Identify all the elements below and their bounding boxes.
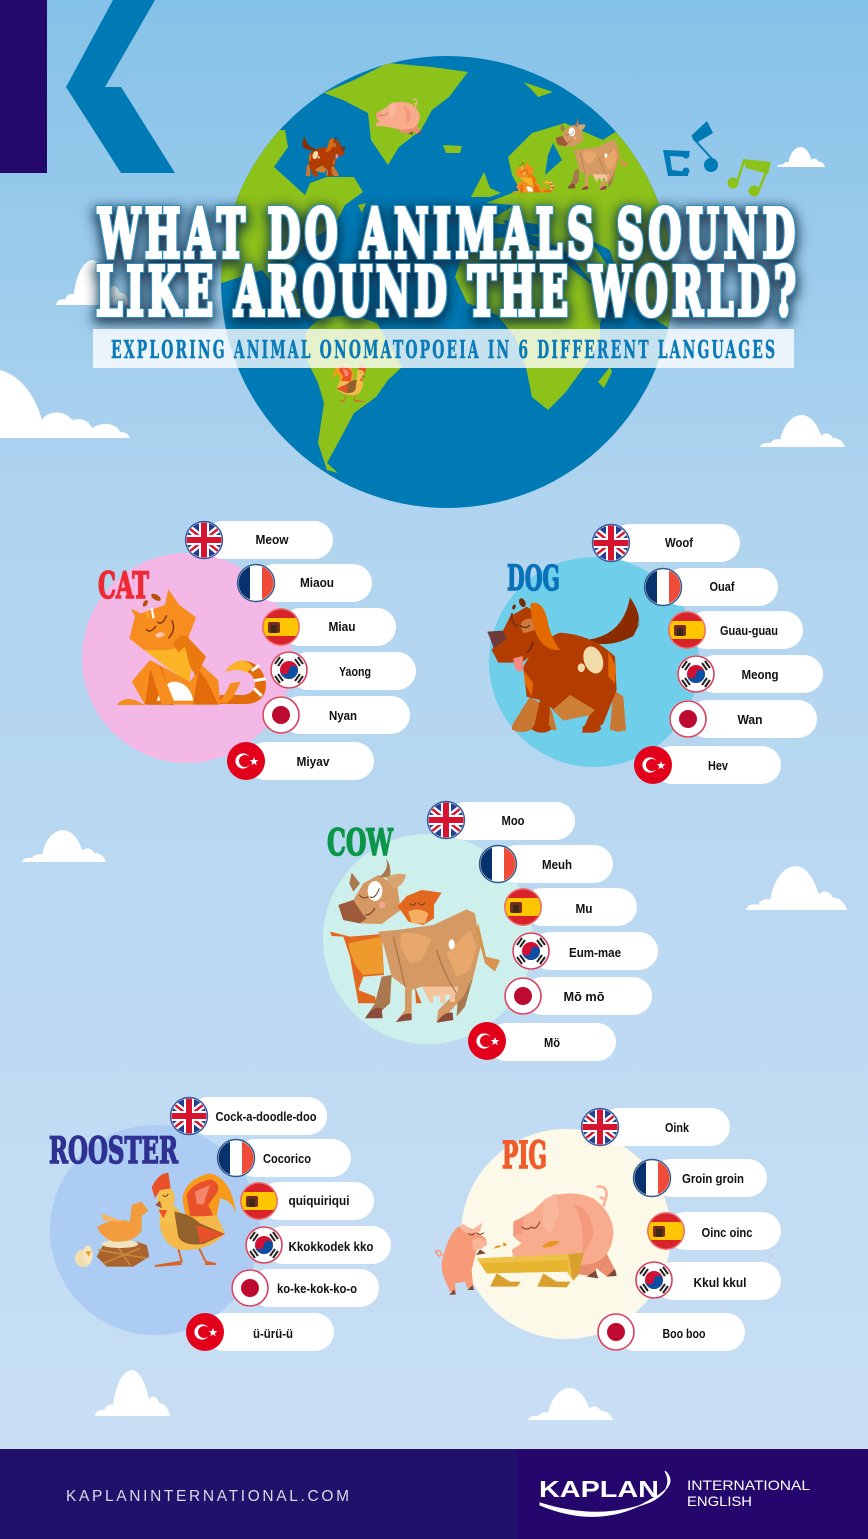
cloud: top right bbox=[777, 147, 825, 167]
navy corner block bbox=[0, 0, 47, 173]
pig illustration bbox=[436, 1186, 617, 1295]
pig: English bbox=[581, 1108, 730, 1146]
cat: English bbox=[185, 521, 333, 559]
cat: Spanish: Miau bbox=[328, 619, 356, 634]
cow: Spanish: Mu bbox=[576, 901, 593, 916]
mini dog on globe bbox=[302, 137, 346, 176]
cow: Japanese bbox=[504, 977, 652, 1015]
cow heading: COW bbox=[327, 822, 393, 864]
subtitle banner bbox=[93, 329, 794, 368]
cat illustration bbox=[117, 589, 266, 705]
rooster: Spanish bbox=[240, 1182, 374, 1220]
cow illustration bbox=[330, 858, 500, 1023]
cat: Korean bbox=[270, 651, 416, 690]
cat: Japanese bbox=[262, 696, 410, 734]
pig: English: Oink bbox=[665, 1120, 690, 1135]
panel: cat bbox=[82, 521, 416, 780]
cow: French: Meuh bbox=[542, 857, 572, 872]
cow: Spanish bbox=[504, 888, 637, 926]
dog: Turkish bbox=[634, 746, 781, 784]
rooster: French bbox=[217, 1139, 351, 1177]
rooster: Spanish: quiquiriqui bbox=[288, 1193, 350, 1208]
Kaplan logo: ENGLISH bbox=[687, 1493, 752, 1509]
panel: dog bbox=[487, 524, 823, 784]
rooster: English: Cock-a-doodle-doo bbox=[216, 1109, 317, 1124]
rooster: English bbox=[170, 1097, 327, 1135]
rooster: Korean: Kkokkodek kko bbox=[288, 1239, 374, 1254]
cow: Turkish: Mö bbox=[544, 1035, 560, 1050]
cat: Spanish bbox=[262, 608, 396, 646]
pig: Spanish bbox=[647, 1212, 781, 1250]
dog circle bbox=[489, 557, 699, 767]
cat: Japanese: Nyan bbox=[329, 708, 357, 723]
panel: cow bbox=[323, 801, 658, 1061]
cow circle bbox=[323, 834, 533, 1044]
dog: Spanish bbox=[668, 611, 803, 649]
cloud: right centre bbox=[746, 866, 847, 910]
rooster: Japanese bbox=[231, 1269, 379, 1307]
pig: Japanese: Boo boo bbox=[662, 1326, 706, 1341]
Kaplan logo: KAPLAN bbox=[539, 1476, 659, 1502]
pig: Korean bbox=[635, 1261, 781, 1300]
rooster heading: ROOSTER bbox=[49, 1130, 179, 1172]
dog: Turkish: Hev bbox=[708, 758, 729, 773]
panel: pig bbox=[436, 1108, 781, 1351]
cow: English: Moo bbox=[502, 813, 525, 828]
subtitle banner: EXPLORING ANIMAL ONOMATOPOEIA IN 6 DIFFERENT LANGUAGES bbox=[111, 336, 775, 364]
mini cow on globe bbox=[556, 117, 627, 190]
title bbox=[96, 194, 796, 331]
dog: Spanish: Guau-guau bbox=[720, 623, 778, 638]
cloud: left behind title bbox=[56, 260, 130, 305]
Kaplan logo bbox=[539, 1471, 810, 1516]
cloud: left centre bbox=[22, 830, 106, 862]
Kaplan logo: INTERNATIONAL bbox=[687, 1477, 810, 1493]
rooster: Japanese: ko-ke-kok-ko-o bbox=[277, 1281, 357, 1296]
mini pig on globe bbox=[376, 99, 421, 134]
footer URL: KAPLANINTERNATIONAL.COM bbox=[66, 1488, 349, 1505]
cat heading: CAT bbox=[98, 565, 149, 607]
mini cat on globe bbox=[512, 161, 554, 193]
pig: French bbox=[633, 1159, 767, 1197]
cloud: big left bbox=[0, 370, 130, 438]
cat: Turkish: Miyav bbox=[296, 754, 330, 769]
cow: Japanese: Mō mō bbox=[564, 989, 605, 1004]
dog: Korean: Meong bbox=[742, 667, 779, 682]
pig: French: Groin groin bbox=[682, 1171, 744, 1186]
rooster: French: Cocorico bbox=[263, 1151, 311, 1166]
rooster: Turkish: ü-ürü-ü bbox=[253, 1326, 293, 1341]
music notes bbox=[663, 121, 771, 196]
Kaplan K chevron bbox=[66, 0, 175, 173]
globe bbox=[200, 56, 690, 508]
dog heading: DOG bbox=[507, 558, 560, 599]
title: LIKE AROUND THE WORLD? bbox=[96, 252, 796, 331]
dog illustration bbox=[487, 597, 640, 733]
dog: French: Ouaf bbox=[710, 579, 735, 594]
pig: Spanish: Oinc oinc bbox=[702, 1225, 752, 1240]
pig heading: PIG bbox=[502, 1133, 547, 1177]
cloud: right of globe bbox=[760, 415, 845, 447]
mini rooster on globe bbox=[332, 363, 366, 402]
dog: Japanese bbox=[669, 700, 817, 738]
cow: Turkish bbox=[468, 1022, 616, 1061]
dog: English: Woof bbox=[665, 535, 694, 550]
cloud: bottom left bbox=[95, 1370, 170, 1416]
cat: French: Miaou bbox=[300, 575, 334, 590]
dog: Korean bbox=[677, 655, 823, 693]
dog: Japanese: Wan bbox=[738, 712, 763, 727]
cloud: bottom centre bbox=[528, 1388, 613, 1420]
cow: French bbox=[479, 845, 613, 883]
cat circle bbox=[82, 553, 292, 763]
cow: Korean: Eum-mae bbox=[569, 945, 621, 960]
footer bbox=[0, 1449, 868, 1539]
rooster circle bbox=[50, 1125, 260, 1335]
pig: Japanese bbox=[597, 1313, 745, 1351]
cat: French bbox=[237, 564, 372, 602]
pig circle bbox=[461, 1129, 671, 1339]
cow: English bbox=[427, 801, 575, 840]
cat: Korean: Yaong bbox=[339, 664, 371, 679]
title: WHAT DO ANIMALS SOUND bbox=[97, 194, 795, 273]
rooster: Korean bbox=[245, 1226, 391, 1264]
panel: rooster bbox=[49, 1097, 391, 1351]
cat: English: Meow bbox=[256, 532, 289, 547]
rooster illustration bbox=[75, 1173, 236, 1267]
cat: Turkish bbox=[227, 742, 374, 780]
dog: French bbox=[644, 568, 778, 606]
dog: English bbox=[592, 524, 740, 562]
rooster: Turkish bbox=[186, 1313, 334, 1351]
cow: Korean bbox=[512, 932, 658, 970]
pig: Korean: Kkul kkul bbox=[694, 1275, 746, 1290]
